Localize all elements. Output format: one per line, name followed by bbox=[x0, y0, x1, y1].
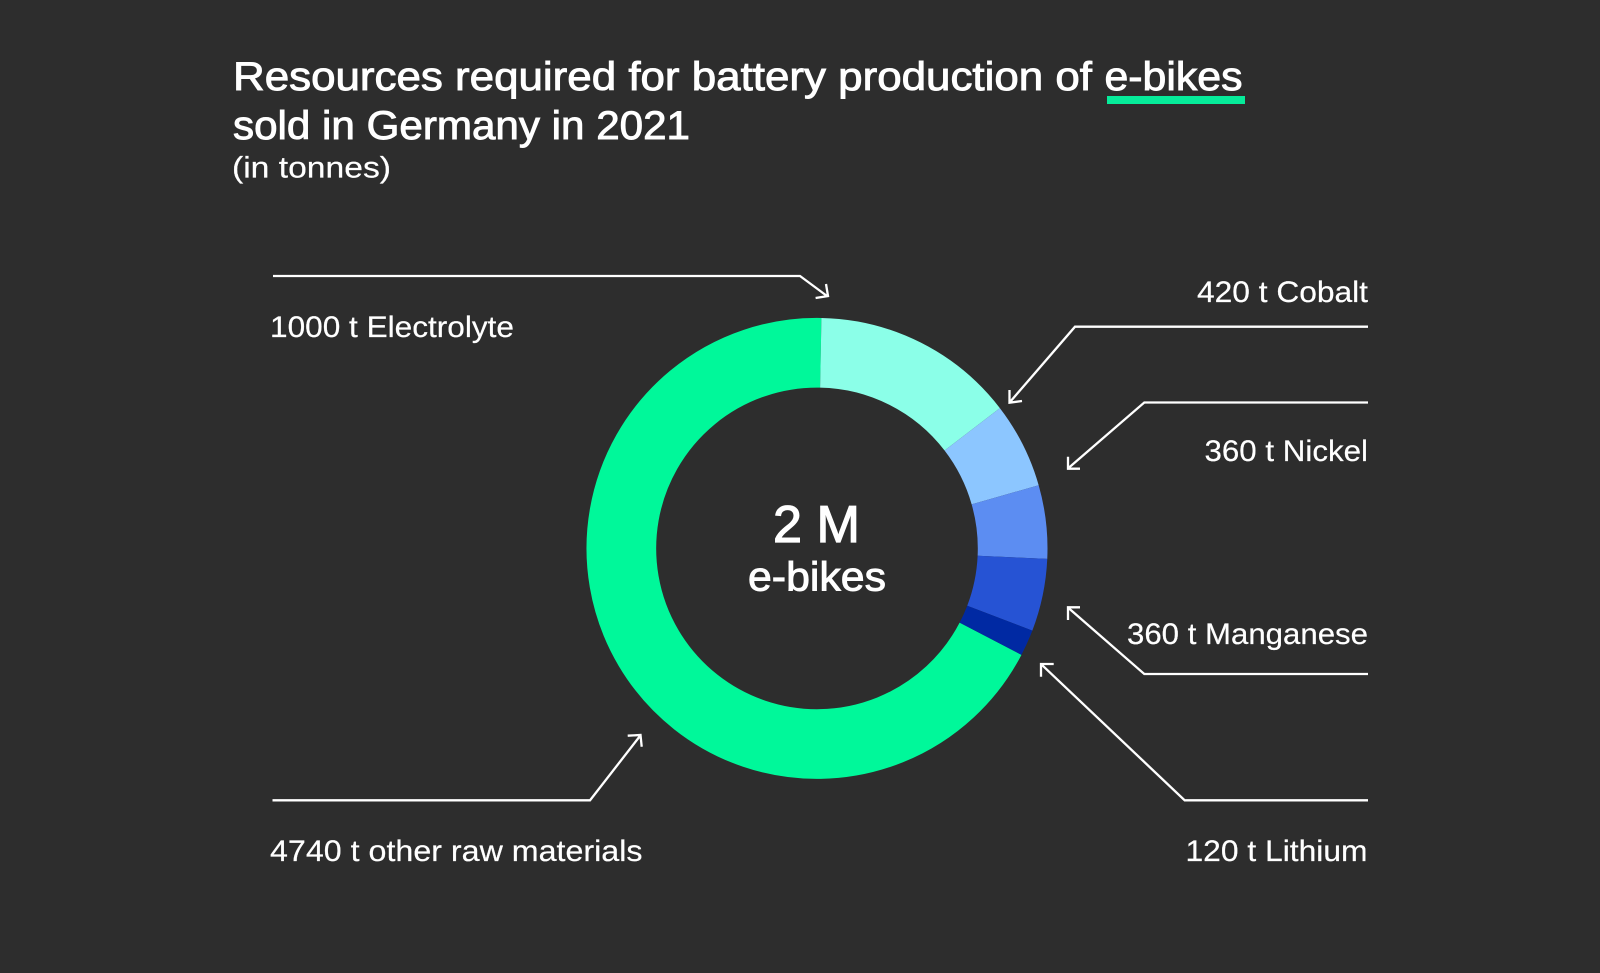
title line 2: sold in Germany in 2021 bbox=[233, 104, 690, 148]
centre figure: 2 M bbox=[773, 496, 860, 554]
segment: manganese bbox=[1000, 557, 1012, 618]
label: lithium: 120 t Lithium bbox=[1186, 835, 1368, 868]
segment: lithium bbox=[991, 618, 1000, 639]
label: electrolyte: 1000 t Electrolyte bbox=[270, 311, 514, 344]
callout: nickel bbox=[1068, 402, 1368, 469]
segment: cobalt bbox=[972, 429, 1005, 495]
callout: electrolyte bbox=[270, 276, 828, 344]
arrow to other raw materials segment bbox=[272, 735, 642, 800]
unit subtitle: (in tonnes) bbox=[232, 152, 391, 184]
label: manganese: 360 t Manganese bbox=[1127, 618, 1368, 651]
callout: manganese bbox=[1068, 607, 1368, 674]
donut chart bbox=[621, 353, 1013, 744]
arrow to manganese segment bbox=[1068, 607, 1368, 674]
arrow to cobalt segment bbox=[1010, 327, 1368, 403]
label: other raw materials: 4740 t other raw materials bbox=[270, 835, 642, 868]
centre caption: e-bikes bbox=[748, 554, 886, 600]
label: nickel: 360 t Nickel bbox=[1204, 435, 1368, 468]
arrow to lithium segment bbox=[1041, 664, 1368, 800]
donut centre label bbox=[748, 496, 886, 600]
title underline bbox=[1107, 96, 1245, 104]
segment: nickel bbox=[1005, 495, 1013, 557]
title block bbox=[232, 55, 1245, 184]
arrow to electrolyte segment bbox=[273, 276, 828, 298]
title line 1: Resources required for battery production of bbox=[233, 55, 1093, 99]
callout: lithium bbox=[1041, 664, 1368, 868]
label: cobalt: 420 t Cobalt bbox=[1197, 276, 1369, 309]
callout: cobalt bbox=[1010, 276, 1369, 403]
callout: other raw materials bbox=[270, 735, 642, 868]
title highlighted word: e-bikes: e-bikes bbox=[1104, 55, 1242, 99]
segment: other raw materials bbox=[621, 353, 991, 744]
arrow to nickel segment bbox=[1068, 402, 1368, 469]
segment: electrolyte bbox=[821, 353, 972, 429]
